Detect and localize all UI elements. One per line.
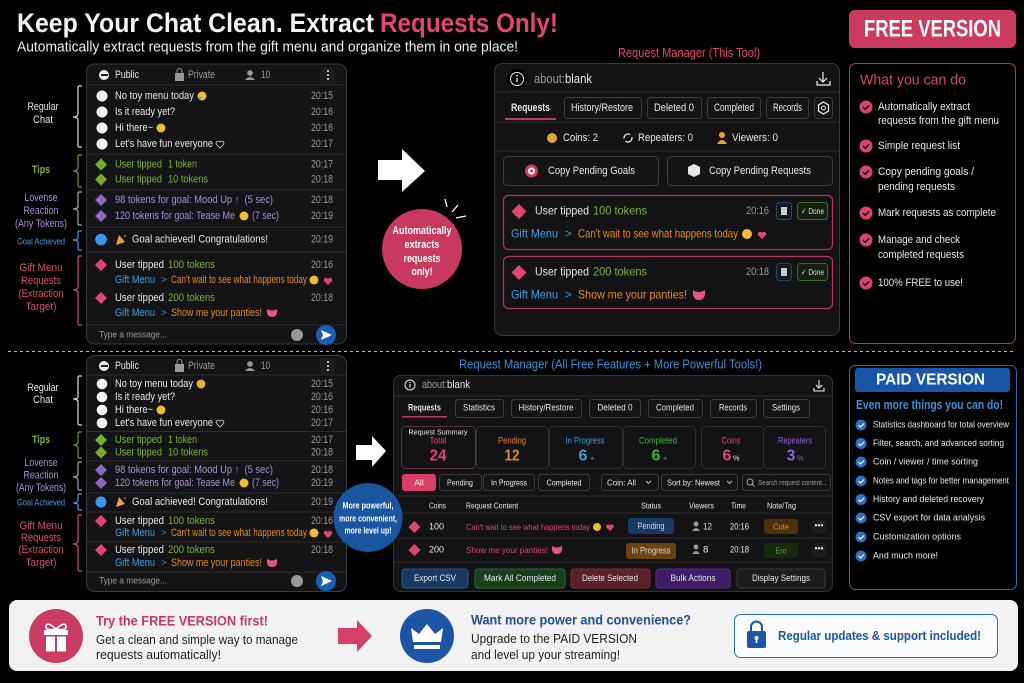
labels: paid chat categories xyxy=(16,376,82,571)
request card 2: 20:18 xyxy=(746,266,769,278)
tabs: Requests xyxy=(511,102,550,114)
regular chat rows: Is it ready yet? xyxy=(115,391,175,403)
gift menu rows: Show me your panties! xyxy=(171,557,262,569)
labels: paid chat categories: (Extraction xyxy=(18,544,64,556)
gift menu rows: Gift Menu xyxy=(115,307,155,319)
tabs: Records xyxy=(719,402,747,414)
callout: automatically extracts: Automatically xyxy=(392,225,452,237)
action buttons: Delete Selected xyxy=(582,573,638,584)
lovense rows: 120 tokens for goal: Tease Me xyxy=(115,210,235,222)
regular chat rows: Hi there~ xyxy=(115,122,153,134)
request card 2 xyxy=(504,256,832,308)
text: try free: Get a clean and simple way to manage xyxy=(96,633,298,647)
filter row: Coin: All xyxy=(607,478,636,488)
tabs: Completed xyxy=(656,402,694,414)
chat header xyxy=(99,67,335,83)
free feature list: requests from the gift menu xyxy=(878,115,999,127)
title: Requests Only! xyxy=(380,8,558,38)
free feature list: pending requests xyxy=(878,181,955,193)
summary cards: Coins xyxy=(722,436,741,446)
panel: paid features xyxy=(850,366,1016,590)
tip rows: 20:17 xyxy=(311,158,333,170)
request card 1 xyxy=(504,196,832,250)
panel: bottom call to action xyxy=(9,600,1018,671)
tabs: Requests xyxy=(408,402,441,414)
callout: automatically extracts xyxy=(382,199,466,289)
table row 2: ••• xyxy=(814,544,824,554)
free feature list xyxy=(860,100,999,290)
regular chat rows: Hi there~ xyxy=(115,404,153,416)
regular chat rows: 20:16 xyxy=(311,106,333,118)
badge: paid version xyxy=(855,368,1010,392)
gift menu rows: Show me your panties! xyxy=(171,307,262,319)
request card 1: > xyxy=(565,228,572,240)
text: try free xyxy=(96,614,298,662)
section divider xyxy=(8,350,1016,352)
gift menu rows xyxy=(95,259,333,319)
summary cards xyxy=(402,426,826,468)
lovense rows: 20:19 xyxy=(311,210,333,222)
summary cards: + xyxy=(663,454,667,462)
paid feature list xyxy=(856,420,1009,562)
chat header: 10 xyxy=(261,360,270,372)
labels: free chat categories: Reaction xyxy=(24,205,59,217)
icon: gift xyxy=(29,609,83,663)
filter row: Pending xyxy=(447,478,473,488)
gift menu rows: User tipped xyxy=(115,292,164,304)
gift menu rows: Can't wait to see what happens today xyxy=(171,274,308,286)
labels: paid chat categories: Requests xyxy=(21,532,61,544)
table row 1: Can't wait to see what happens today xyxy=(466,522,591,532)
lovense rows xyxy=(95,464,333,489)
filter row: All xyxy=(414,478,424,488)
lovense rows: 120 tokens for goal: Tease Me xyxy=(115,477,235,489)
summary cards: + xyxy=(590,454,594,462)
gift menu rows: > xyxy=(161,308,167,318)
table row 2: 20:18 xyxy=(730,544,749,556)
stats row: Viewers: 0 xyxy=(732,132,778,144)
filter row: Sort by: Newest xyxy=(667,478,721,488)
table row 1: 12 xyxy=(703,522,712,532)
table row 1: ••• xyxy=(814,520,824,532)
icon: crown xyxy=(400,609,454,663)
table row 2: In Progress xyxy=(632,546,671,556)
regular chat rows: 20:16 xyxy=(311,404,333,416)
copy buttons xyxy=(504,156,832,186)
tip rows: 10 tokens xyxy=(168,446,208,458)
callout: more powerful xyxy=(334,483,402,552)
labels: free chat categories: Target) xyxy=(26,301,56,313)
summary cards: 6 xyxy=(579,448,588,464)
summary cards: Request Summary xyxy=(408,428,468,436)
labels: paid chat categories: Tips xyxy=(32,434,50,446)
goal achieved row: 20:19 xyxy=(311,496,333,508)
address bar: about: xyxy=(534,72,565,86)
panel: free features: What you can do xyxy=(860,72,966,88)
arrow: to paid xyxy=(338,620,372,652)
callout: automatically extracts: extracts xyxy=(404,239,440,251)
regular chat rows: Is it ready yet? xyxy=(115,106,175,118)
free feature list: Manage and check xyxy=(878,234,961,246)
paid feature list: Filter, search, and advanced sorting xyxy=(873,438,1004,449)
labels: free chat categories: Tips xyxy=(32,164,50,176)
regular chat rows: Let's have fun everyone xyxy=(115,138,213,150)
tip rows xyxy=(95,158,333,186)
tabs: History/Restore xyxy=(518,402,574,414)
gift menu rows: User tipped xyxy=(115,544,164,556)
callout: more powerful: More powerful, xyxy=(342,500,394,512)
table row 1: 100 xyxy=(429,522,444,532)
labels: free chat categories: Regular xyxy=(28,101,59,113)
tabs: Completed xyxy=(714,102,754,114)
gift menu rows: 100 tokens xyxy=(168,515,215,527)
gift menu rows: User tipped xyxy=(115,259,164,271)
tip rows: User tipped xyxy=(115,158,162,170)
summary cards: 24 xyxy=(430,448,447,464)
goal achieved row: Goal achieved! Congratulations! xyxy=(132,496,268,508)
lovense rows: (7 sec) xyxy=(252,210,279,222)
labels: paid chat categories: Chat xyxy=(33,394,53,406)
goal achieved row: Goal achieved! Congratulations! xyxy=(132,234,268,246)
lovense rows: 20:19 xyxy=(311,477,333,489)
chat header: Private xyxy=(188,69,215,81)
labels: paid chat categories: Gift Menu xyxy=(20,520,63,532)
heading: request manager paid: Request Manager (All Free Features + More Powerful Tools!) xyxy=(459,358,762,372)
address bar xyxy=(405,379,824,391)
request card 1: Gift Menu xyxy=(511,228,558,240)
panel: free chat xyxy=(86,64,346,345)
labels: free chat categories xyxy=(15,86,82,325)
tip rows: User tipped xyxy=(115,446,162,458)
table row 2: 8 xyxy=(703,544,708,556)
table header: Time xyxy=(731,500,746,510)
goal achieved row xyxy=(96,496,333,508)
labels: paid chat categories: Goal Achieved xyxy=(17,498,65,508)
tip rows: 10 tokens xyxy=(168,174,208,186)
goal achieved row xyxy=(95,234,333,246)
action buttons: Display Settings xyxy=(752,573,810,584)
panel: free request manager xyxy=(494,64,840,336)
labels: free chat categories: (Any Tokens) xyxy=(15,218,67,230)
regular chat rows: 20:15 xyxy=(311,378,333,390)
labels: free chat categories: Requests xyxy=(21,275,61,287)
regular chat rows: 20:16 xyxy=(311,391,333,403)
tip rows: User tipped xyxy=(115,434,162,446)
lovense rows: 20:18 xyxy=(311,194,333,206)
text: want more xyxy=(471,612,691,662)
summary cards: 3 xyxy=(787,448,796,464)
request card 2: > xyxy=(565,288,572,302)
chat header: 10 xyxy=(261,69,270,81)
summary cards: In Progress xyxy=(566,436,605,446)
summary cards: % xyxy=(733,454,740,462)
action buttons: Export CSV xyxy=(414,573,456,584)
free feature list: Simple request list xyxy=(878,140,960,152)
request card 2: ✓ Done xyxy=(801,267,824,277)
address bar: about: xyxy=(422,379,447,391)
gift menu rows: > xyxy=(161,558,167,568)
chat header xyxy=(99,358,335,374)
callout: more powerful: more convenient, xyxy=(339,514,397,524)
tip rows: 20:18 xyxy=(311,446,333,458)
lovense rows xyxy=(95,194,333,222)
request card 2: 200 tokens xyxy=(593,266,647,278)
callout: more powerful: more level up! xyxy=(344,526,392,536)
gift menu rows xyxy=(95,515,333,569)
heading: request manager free: Request Manager (This Tool) xyxy=(618,46,760,60)
message input: Type a message... xyxy=(99,330,167,340)
copy buttons: Copy Pending Requests xyxy=(709,165,811,177)
regular chat rows: 20:17 xyxy=(311,417,333,429)
lovense rows: (7 sec) xyxy=(252,477,279,489)
request card 1: 20:16 xyxy=(746,205,769,217)
table header xyxy=(429,500,796,510)
goal achieved row: 20:19 xyxy=(311,234,333,246)
free feature list: completed requests xyxy=(878,249,964,261)
request card 1: User tipped xyxy=(535,204,589,218)
request card 2: Show me your panties! xyxy=(578,288,687,302)
arrow: paid xyxy=(356,436,386,467)
table header: Viewers xyxy=(689,500,714,510)
summary cards: Pending xyxy=(498,436,526,446)
table row 2 xyxy=(408,543,826,559)
gift menu rows: 200 tokens xyxy=(168,292,215,304)
tabs: Records xyxy=(773,102,802,114)
table row 1: Cute xyxy=(773,522,789,532)
address bar: blank xyxy=(565,72,593,86)
lovense rows: 98 tokens for goal: Mood Up ↑ (5 sec) xyxy=(115,194,273,206)
message input xyxy=(99,571,336,591)
summary cards: 12 xyxy=(504,448,520,464)
summary cards: Completed xyxy=(639,436,677,446)
paid feature list: History and deleted recovery xyxy=(873,494,984,505)
tabs: Settings xyxy=(772,402,800,414)
labels: free chat categories: Gift Menu xyxy=(20,262,63,274)
panel: free features xyxy=(850,64,1016,344)
action buttons xyxy=(402,569,825,588)
gift menu rows: Gift Menu xyxy=(115,527,155,539)
stats row: Coins: 2 xyxy=(563,132,598,144)
chat header: Public xyxy=(115,69,140,81)
labels: paid chat categories: Reaction xyxy=(24,470,59,482)
labels: paid chat categories: Target) xyxy=(26,557,56,569)
action buttons: Mark All Completed xyxy=(484,573,556,584)
tabs: Deleted 0 xyxy=(598,402,632,414)
tip rows xyxy=(95,434,333,458)
table row 2: Ero xyxy=(776,546,787,556)
paid feature list: Customization options xyxy=(873,532,961,542)
chat header: Private xyxy=(188,360,215,372)
tip rows: User tipped xyxy=(115,174,162,186)
panel: paid request manager xyxy=(394,376,832,592)
regular chat rows: Let's have fun everyone xyxy=(115,417,213,429)
gift menu rows: > xyxy=(161,528,167,538)
tabs: Deleted 0 xyxy=(654,102,694,114)
regular chat rows: 20:17 xyxy=(311,138,333,150)
summary cards: Repeaters xyxy=(778,436,812,446)
paid feature list: And much more! xyxy=(873,550,938,562)
text: try free: requests automatically! xyxy=(96,648,221,662)
table row 2: 200 xyxy=(429,544,444,556)
regular chat rows xyxy=(96,90,333,150)
text: try free: Try the FREE VERSION first! xyxy=(96,614,268,628)
free feature list: Mark requests as complete xyxy=(878,207,996,219)
gift menu rows: Gift Menu xyxy=(115,274,155,286)
request card 2: User tipped xyxy=(535,266,589,278)
table header: Request Content xyxy=(466,500,519,510)
message input: Type a message... xyxy=(99,576,167,586)
labels: free chat categories: Chat xyxy=(33,114,53,126)
address bar: blank xyxy=(447,379,471,391)
table row 1 xyxy=(408,518,826,534)
table header: Status xyxy=(641,500,661,510)
chat header: Public xyxy=(115,360,140,372)
table row 1: Pending xyxy=(638,521,664,532)
title: Keep Your Chat Clean. Extract xyxy=(17,8,374,38)
filter row: Completed xyxy=(546,478,582,488)
badge: free version xyxy=(849,10,1016,48)
gift menu rows: Can't wait to see what happens today xyxy=(171,527,308,539)
regular chat rows: No toy menu today xyxy=(115,90,195,102)
gift menu rows: 20:18 xyxy=(311,292,333,304)
paid feature list: Coin / viewer / time sorting xyxy=(873,456,978,468)
address bar xyxy=(507,69,830,89)
regular chat rows: No toy menu today xyxy=(115,378,194,390)
gift menu rows: 20:16 xyxy=(311,515,333,527)
panel: paid chat xyxy=(86,356,346,592)
text: want more: Want more power and convenience? xyxy=(471,612,691,628)
regular chat rows: 20:16 xyxy=(311,122,333,134)
table header: Note/Tag xyxy=(767,500,796,510)
text: want more: Upgrade to the PAID VERSION xyxy=(471,632,637,646)
lovense rows: 20:18 xyxy=(311,464,333,476)
callout: automatically extracts: only! xyxy=(412,266,432,278)
paid feature list: CSV export for data analysis xyxy=(873,512,985,524)
request card 2: Gift Menu xyxy=(511,288,558,302)
subtitle: Automatically extract requests from the gift menu and organize them in one place! xyxy=(17,38,518,56)
tabs: Statistics xyxy=(463,402,495,414)
gift menu rows: Gift Menu xyxy=(115,557,155,569)
summary cards: Total xyxy=(430,436,446,446)
request card 1: ✓ Done xyxy=(801,206,824,216)
free feature list: Copy pending goals / xyxy=(878,166,974,178)
table row 2: Show me your panties! xyxy=(466,545,548,555)
summary cards: 6 xyxy=(652,448,661,464)
labels: free chat categories: (Extraction xyxy=(18,288,64,300)
request card 1: Can't wait to see what happens today xyxy=(578,228,738,240)
action buttons: Bulk Actions xyxy=(670,573,716,584)
gift menu rows: 20:16 xyxy=(311,259,333,271)
request card 1: 100 tokens xyxy=(593,204,647,218)
tip rows: 20:18 xyxy=(311,174,333,186)
stats row xyxy=(547,132,778,144)
callout: regular updates xyxy=(734,614,998,658)
copy buttons: Copy Pending Goals xyxy=(548,165,635,177)
tabs: History/Restore xyxy=(571,102,633,114)
tip rows: 20:17 xyxy=(311,434,333,446)
free feature list: Automatically extract xyxy=(878,101,970,113)
gift menu rows: User tipped xyxy=(115,515,164,527)
filter row: In Progress xyxy=(491,478,527,488)
summary cards: % xyxy=(797,454,804,462)
gift menu rows: 200 tokens xyxy=(168,544,215,556)
tip rows: 1 token xyxy=(168,158,197,170)
filter row: Search request content... xyxy=(758,478,827,487)
arrow: free xyxy=(378,149,425,192)
table row 1: 20:16 xyxy=(730,522,749,532)
labels: free chat categories: Lovense xyxy=(24,192,58,204)
labels: paid chat categories: Lovense xyxy=(24,457,58,469)
callout: automatically extracts: requests xyxy=(404,253,441,265)
tabs xyxy=(402,400,810,418)
labels: free chat categories: Goal Achieved xyxy=(17,236,65,248)
text: want more: and level up your streaming! xyxy=(471,648,620,662)
gift menu rows: 100 tokens xyxy=(168,259,215,271)
free feature list: 100% FREE to use! xyxy=(878,277,963,289)
regular chat rows: 20:15 xyxy=(311,90,333,102)
stats row: Repeaters: 0 xyxy=(638,132,693,144)
labels: paid chat categories: (Any Tokens) xyxy=(16,482,66,494)
labels: paid chat categories: Regular xyxy=(28,382,59,394)
table header: Coins xyxy=(429,500,446,510)
callout: regular updates: Regular updates & support included! xyxy=(778,629,981,643)
gift menu rows: 20:18 xyxy=(311,544,333,556)
message input xyxy=(99,325,336,345)
tip rows: 1 token xyxy=(168,434,197,446)
tabs xyxy=(505,98,832,120)
badge: paid version: PAID VERSION xyxy=(876,372,985,388)
summary cards: 6 xyxy=(723,448,732,464)
filter row xyxy=(402,474,830,491)
lovense rows: 98 tokens for goal: Mood Up ↑ (5 sec) xyxy=(115,464,273,476)
regular chat rows xyxy=(97,378,333,429)
gift menu rows: > xyxy=(161,274,167,286)
